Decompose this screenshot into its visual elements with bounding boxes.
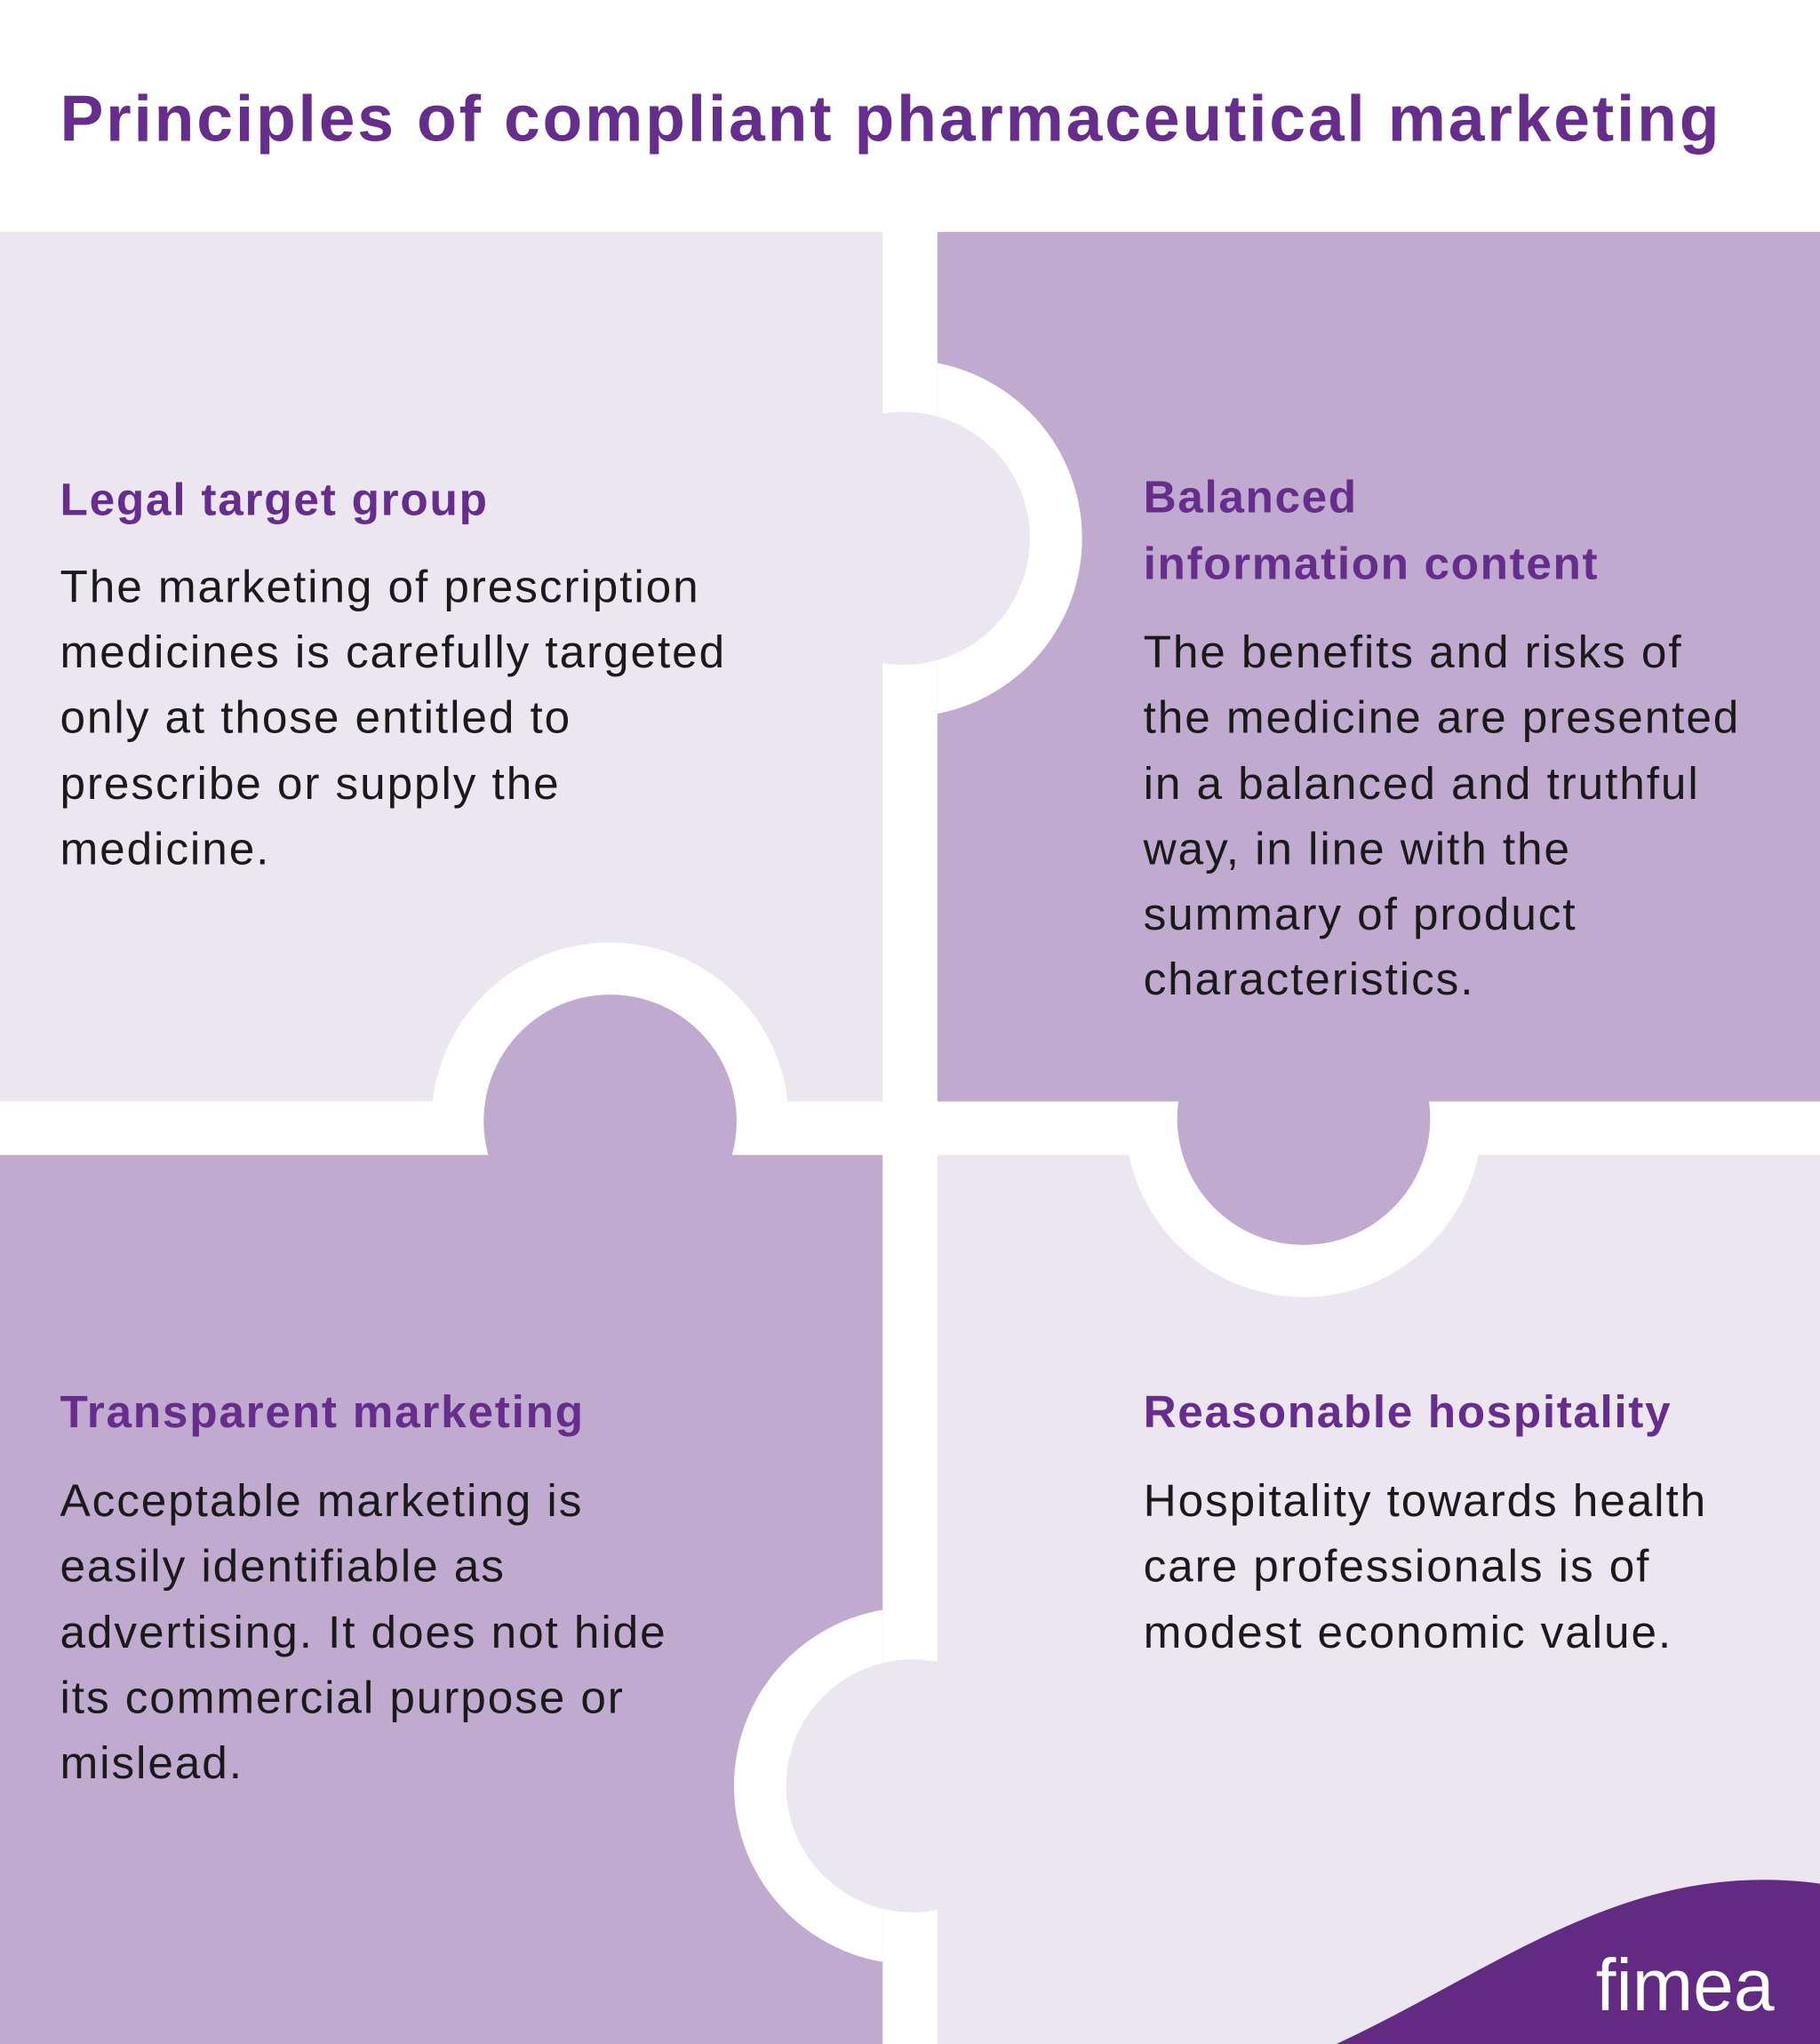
text: reasonable hospitality: Reasonable hospitality (1144, 1386, 1672, 1437)
puzzle tab: bottom-right left (786, 1659, 1039, 1912)
text: reasonable hospitality: modest economic value. (1144, 1607, 1672, 1657)
text: transparent marketing: Acceptable marketing is (60, 1475, 583, 1526)
text: balanced information content: Balanced (1144, 471, 1358, 522)
puzzle tab: top-left to right (777, 412, 1030, 665)
text: reasonable hospitality (1144, 1386, 1721, 1657)
text: balanced information content: characteristics. (1144, 954, 1474, 1004)
text: balanced information content: way, in line with the (1143, 824, 1571, 874)
text: legal target group: The marketing of prescription (60, 562, 700, 612)
text: balanced information content: the medicine are presented (1144, 691, 1740, 742)
text: transparent marketing (60, 1386, 682, 1788)
puzzle tab: top-right down (1177, 992, 1430, 1245)
text: transparent marketing: advertising. It does not hide (60, 1607, 667, 1657)
text: transparent marketing: Transparent marketing (60, 1386, 585, 1437)
panel: balanced information content (937, 232, 1820, 1102)
text: legal target group: Legal target group (60, 474, 489, 524)
text: legal target group: medicines is carefully targeted (60, 627, 726, 677)
text: legal target group: prescribe or supply the (60, 758, 561, 809)
logo: fimea: fimea (1596, 1945, 1775, 2026)
text: reasonable hospitality: care professionals is of (1144, 1540, 1650, 1591)
text: balanced information content: The benefits and risks of (1144, 627, 1683, 677)
panel: legal target group (0, 232, 883, 1102)
text: legal target group (60, 474, 740, 874)
puzzle tab: bottom-left up (483, 994, 737, 1248)
text: transparent marketing: its commercial purpose or (60, 1672, 625, 1722)
text: transparent marketing: easily identifiable as (60, 1540, 506, 1591)
panel: transparent marketing (0, 1155, 883, 2044)
panel: reasonable hospitality (937, 1155, 1820, 2044)
text: legal target group: only at those entitled to (60, 691, 571, 742)
text: transparent marketing: mislead. (60, 1737, 243, 1788)
title: Principles of compliant pharmaceutical marketing (60, 82, 1721, 155)
logo wave (1337, 1880, 1820, 2044)
text: reasonable hospitality: Hospitality towards health (1144, 1475, 1707, 1526)
text: legal target group: medicine. (60, 824, 270, 874)
text: balanced information content: summary of product (1144, 889, 1577, 939)
text: balanced information content: information content (1144, 538, 1599, 588)
text: balanced information content (1143, 471, 1754, 1004)
text: balanced information content: in a balanced and truthful (1144, 758, 1700, 809)
